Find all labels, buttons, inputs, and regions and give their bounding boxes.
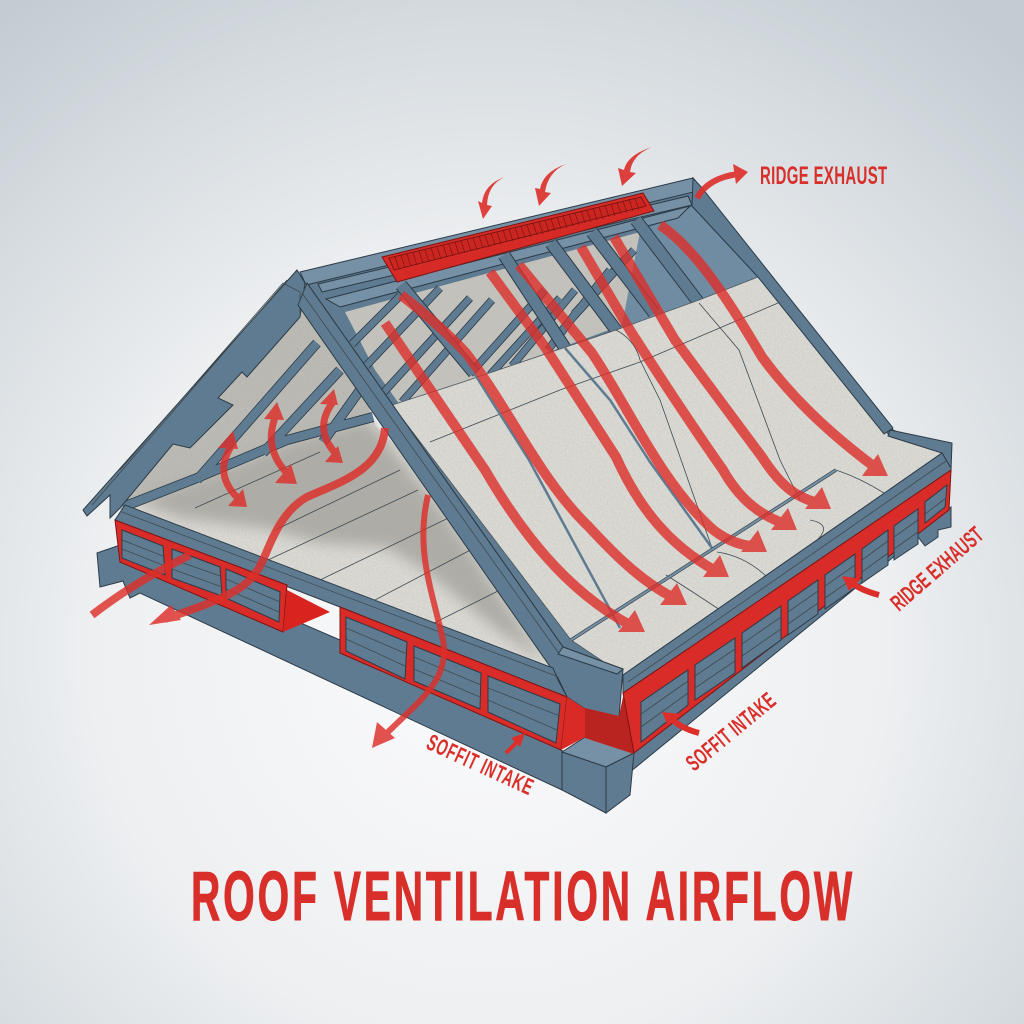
label: ridge exhaust top: RIDGE EXHAUST: [760, 162, 887, 190]
gap under vents: [307, 608, 340, 638]
arrow 7: [660, 225, 888, 476]
double arrow C: [320, 389, 343, 463]
long curved arrow D: [149, 428, 385, 625]
interior blue bay: [620, 207, 758, 335]
ridge strips: [300, 178, 702, 285]
slope backing: [307, 180, 942, 675]
small pointer arrows: [506, 576, 879, 753]
floor seams: [195, 452, 500, 635]
vent group: centre: [340, 607, 637, 754]
label: ridge exhaust right: RIDGE EXHAUST: [886, 522, 989, 617]
vent group: right: [623, 470, 951, 753]
arrow 6: [614, 237, 831, 509]
interior diagonal struts: [352, 250, 634, 402]
title: ROOF VENTILATION AIRFLOW: [191, 858, 852, 936]
interior gray insulation: [345, 232, 690, 405]
double arrow B: [264, 402, 297, 484]
lower timber base frame: [97, 507, 951, 813]
small inflow arrows at ridge: [478, 147, 652, 219]
label: soffit intake left: SOFFIT INTAKE: [422, 730, 537, 801]
ridge vent: [382, 193, 654, 282]
corner red block: [561, 697, 587, 750]
double arrow A: [218, 431, 247, 507]
floor shadow: [135, 419, 545, 662]
tail stream E: [92, 555, 190, 615]
left gable rafter: [83, 270, 305, 518]
ridge exhaust arrow: [697, 164, 748, 198]
eave strip: [115, 453, 951, 697]
insulation seams and creases: [430, 303, 884, 640]
left wall insulation: [112, 300, 380, 510]
right roof slope framing: [300, 178, 952, 675]
arrow 5: [581, 247, 797, 530]
arrow 2: [401, 295, 687, 605]
label: soffit intake right: SOFFIT INTAKE: [682, 688, 781, 777]
arrow 3: [490, 272, 729, 577]
front rafter: [298, 283, 623, 718]
right gable rafter: [692, 178, 893, 434]
arrow 4: [519, 265, 767, 552]
right light insulation: [392, 277, 942, 675]
airflow arrows across right slope: [385, 225, 888, 632]
eave end cap: [888, 430, 952, 470]
floor insulation: [125, 420, 555, 668]
rafters: [401, 220, 699, 373]
left interior gable and floor: [83, 270, 623, 718]
arrow 1: [385, 323, 645, 632]
airflow arrows in left attic: [92, 389, 444, 748]
vent group: left: [115, 520, 330, 632]
left wall struts: [123, 343, 373, 507]
long curved arrow F: [372, 495, 444, 748]
